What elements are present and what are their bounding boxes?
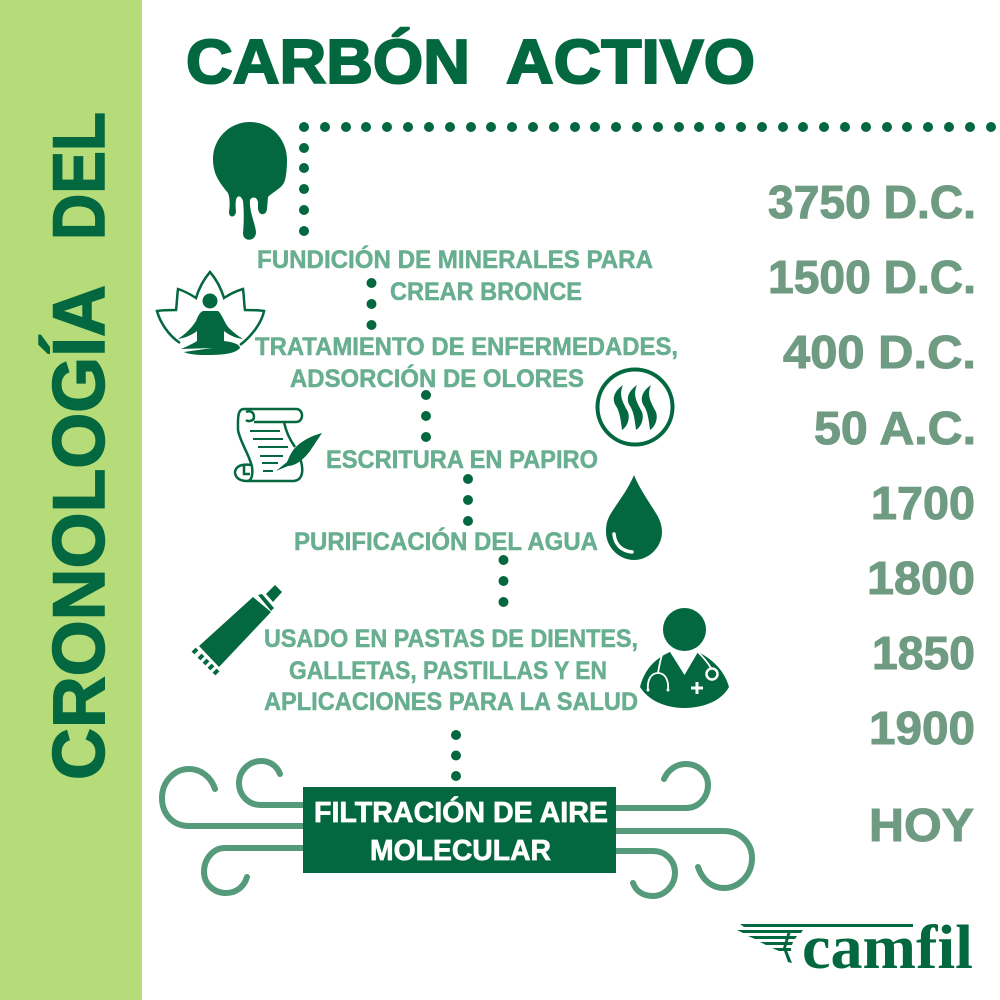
label: fundición: CREAR BRONCE [390, 278, 582, 306]
label: fundición: FUNDICIÓN DE MINERALES PARA [257, 244, 653, 274]
sidebar panel [0, 0, 142, 1000]
logo: camfil: camfil [802, 914, 973, 982]
label: usado en pastas: GALLETAS, PASTILLAS Y EN [289, 657, 607, 685]
icon: air swirls [162, 761, 752, 896]
label: tratamiento [255, 333, 678, 393]
icon: meditating figure on lotus [157, 272, 264, 355]
dates column [768, 176, 976, 851]
label: usado en pastas: USADO EN PASTAS DE DIENTES, [264, 625, 638, 653]
icon: doctor with stethoscope [640, 608, 729, 708]
label box: filtración de aire molecular: FILTRACIÓN DE AIRE [314, 797, 608, 829]
icon: steam in circle [598, 370, 672, 444]
sidebar heading: CRONOLOGÍA [39, 285, 120, 780]
title [186, 28, 755, 97]
label: tratamiento: TRATAMIENTO DE ENFERMEDADES, [255, 333, 678, 361]
dates column: 1500 D.C. [768, 251, 976, 303]
dates column: 3750 D.C. [768, 176, 976, 228]
dates column: 400 D.C. [783, 326, 976, 378]
dates column: 1700 [871, 477, 975, 529]
label box: filtración de aire molecular: MOLECULAR [370, 835, 551, 867]
icon: papyrus scroll and quill [235, 409, 322, 481]
icon: toothpaste tube [193, 585, 282, 674]
timeline dots [299, 122, 996, 781]
label: purificación: PURIFICACIÓN DEL AGUA [294, 526, 598, 556]
dates column: HOY [869, 799, 974, 851]
label: usado en pastas: APLICACIONES PARA LA SALUD [264, 688, 638, 716]
icon: molten drip [213, 122, 287, 240]
label: fundición [257, 244, 653, 306]
label: usado en pastas [264, 625, 638, 716]
sidebar heading: DEL [39, 112, 120, 240]
label: tratamiento: ADSORCIÓN DE OLORES [290, 363, 584, 393]
label box: filtración de aire molecular [303, 787, 616, 873]
dates column: 1900 [869, 702, 975, 754]
label: escritura: ESCRITURA EN PAPIRO [326, 446, 598, 474]
icon: water drop [606, 475, 662, 560]
dates column: 1850 [872, 627, 975, 679]
dates column: 50 A.C. [814, 402, 976, 454]
dates column: 1800 [867, 552, 975, 604]
title: ACTIVO [506, 28, 755, 97]
title: CARBÓN [186, 28, 470, 97]
